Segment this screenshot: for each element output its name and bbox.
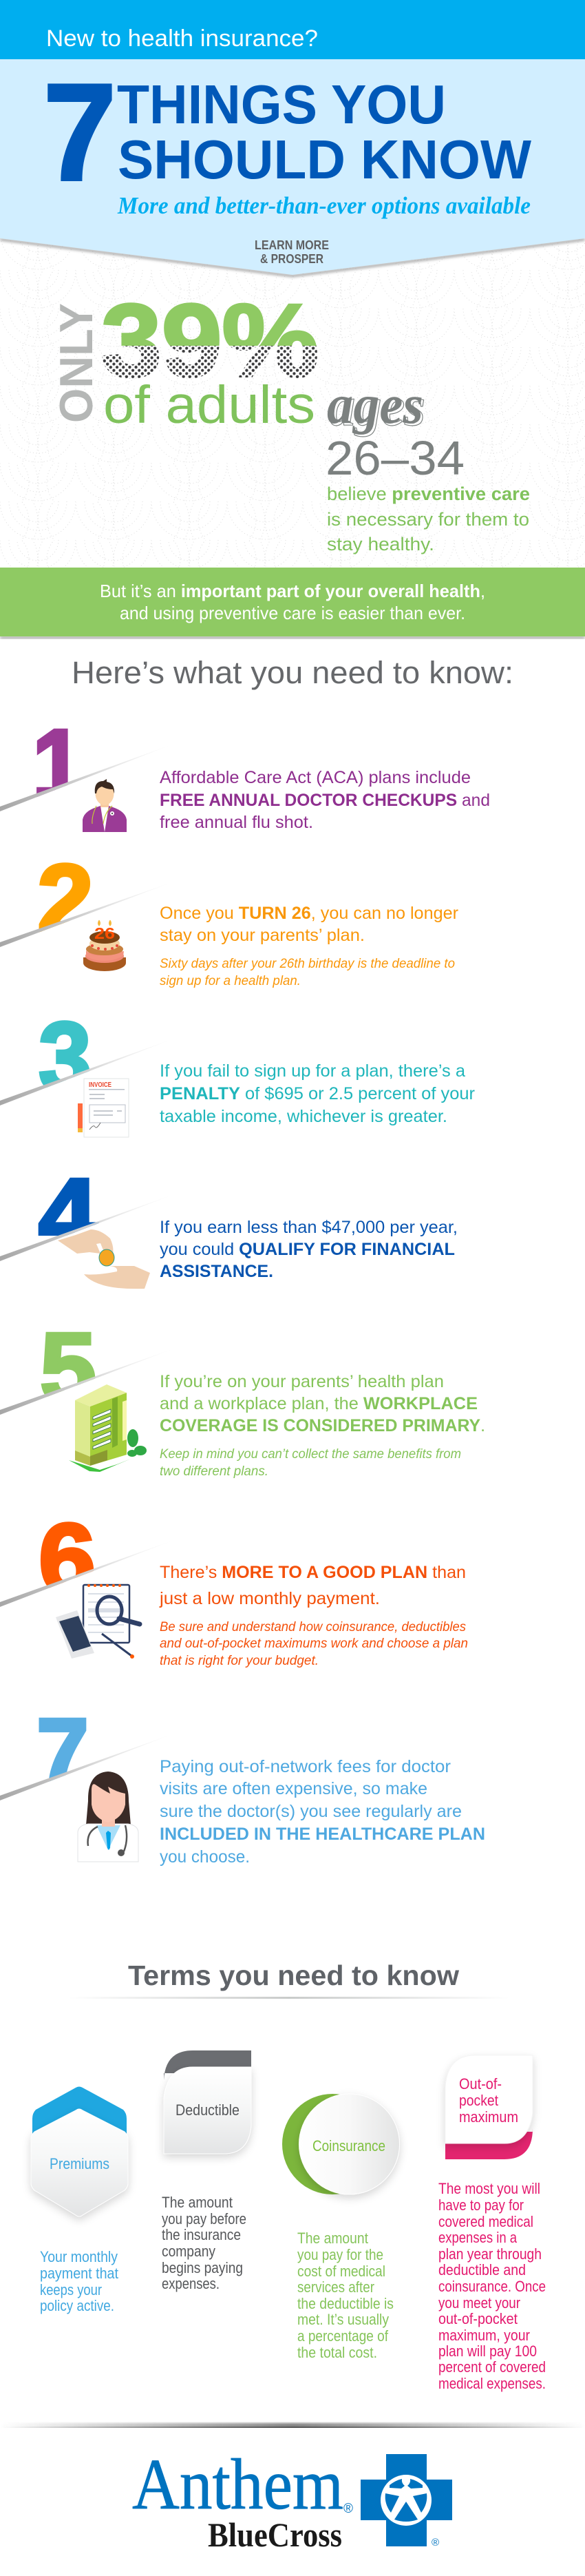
description: expenses in a xyxy=(438,2229,518,2246)
text: stay on your parents’ plan. xyxy=(160,926,365,945)
number 1: 1 xyxy=(32,709,83,820)
description: you pay for the xyxy=(297,2246,383,2263)
logo: anthem blue cross xyxy=(132,2444,452,2554)
label: maximum xyxy=(459,2108,518,2126)
description: percent of covered xyxy=(438,2358,546,2376)
text: Affordable Care Act (ACA) plans include xyxy=(160,768,471,787)
description: keeps your xyxy=(40,2281,102,2298)
label xyxy=(459,2075,518,2126)
text: FREE ANNUAL DOCTOR CHECKUPS and xyxy=(160,791,490,810)
description xyxy=(40,2248,118,2314)
text: taxable income, whichever is greater. xyxy=(160,1107,447,1126)
item 2 xyxy=(0,862,458,988)
heading: should know: SHOULD KNOW xyxy=(118,129,531,190)
text xyxy=(160,1061,475,1126)
panel: light blue title chevron xyxy=(0,55,585,277)
text: believe preventive care: is necessary for them to xyxy=(327,509,529,530)
description xyxy=(162,2194,246,2292)
description: deductible and xyxy=(438,2261,526,2278)
description: maximum, your xyxy=(438,2327,530,2344)
text: learn more and prosper xyxy=(255,238,329,266)
panel: top blue header xyxy=(0,0,585,59)
stat: 39 percent xyxy=(102,302,317,379)
panel: green banner xyxy=(0,568,585,638)
text: only: ONLY xyxy=(50,303,103,423)
heading: things you: THINGS YOU xyxy=(117,74,446,135)
description: coinsurance. Once xyxy=(438,2278,546,2295)
text: Sixty days after your 26th birthday is the deadline to xyxy=(160,957,455,971)
number 6: 6 xyxy=(39,1503,96,1614)
text: banner message: But it’s an important part of your overall health, xyxy=(100,581,485,601)
icon: birthday cake xyxy=(83,920,126,971)
number 2: 2 xyxy=(37,844,94,955)
text: 26-34: 26–34 xyxy=(326,431,465,485)
tagline: More and better-than-ever options available xyxy=(117,192,531,219)
icon: office building xyxy=(69,1384,147,1472)
item 7 xyxy=(0,1718,485,1866)
text: learn more and prosper: LEARN MORE xyxy=(255,238,329,252)
description: plan will pay 100 xyxy=(438,2343,537,2360)
description: The amount xyxy=(162,2194,233,2211)
stat: 39 percent: 39% xyxy=(101,282,319,398)
item 3 xyxy=(0,1020,475,1138)
text: PENALTY of $695 or 2.5 percent of your xyxy=(160,1084,475,1103)
panel: terms you need to know xyxy=(31,1960,546,2392)
panel: patterned background xyxy=(0,234,585,572)
description: you meet your xyxy=(438,2294,520,2312)
description: have to pay for xyxy=(438,2196,524,2214)
label: Out-of- xyxy=(459,2075,502,2092)
heading: 7: 7 xyxy=(43,56,116,209)
text: COVERAGE IS CONSIDERED PRIMARY. xyxy=(160,1416,485,1435)
item 6 xyxy=(0,1521,468,1668)
footer shadow xyxy=(0,2423,585,2576)
icon: blue cross: ® xyxy=(432,2537,439,2548)
text: INCLUDED IN THE HEALTHCARE PLAN xyxy=(160,1825,485,1844)
description: Your monthly xyxy=(40,2248,118,2265)
text: If you’re on your parents’ health plan xyxy=(160,1372,444,1391)
wordmark: Anthem xyxy=(132,2444,343,2524)
description: plan year through xyxy=(438,2245,542,2263)
icon: invoice: INVOICE xyxy=(89,1081,111,1089)
card: deductible xyxy=(162,2050,251,2292)
number 5: 5 xyxy=(40,1312,96,1424)
item 5 xyxy=(0,1332,484,1478)
description xyxy=(438,2180,546,2392)
text: banner message: and using preventive care is easier than ever. xyxy=(120,603,465,623)
item 4 xyxy=(0,1178,456,1289)
text: visits are often expensive, so make xyxy=(160,1779,427,1798)
panel: statistic xyxy=(50,282,530,554)
description: a percentage of xyxy=(297,2327,389,2345)
text: of adults: of adults xyxy=(103,375,315,435)
text xyxy=(159,1563,468,1668)
text: learn more and prosper: & PROSPER xyxy=(260,252,323,266)
text: There’s MORE TO A GOOD PLAN than xyxy=(160,1563,466,1582)
text: sign up for a health plan. xyxy=(160,974,301,988)
description: The amount xyxy=(297,2230,368,2247)
text xyxy=(160,1372,485,1479)
card: coinsurance xyxy=(282,2094,399,2361)
logo: anthem blue cross: ® xyxy=(343,2502,353,2516)
stat: 39 percent: 39% xyxy=(101,282,319,398)
text: believe preventive care: stay healthy. xyxy=(327,534,434,554)
icon: birthday cake: 26 xyxy=(94,924,115,942)
text: Keep in mind you can’t collect the same benefits from xyxy=(160,1447,461,1462)
text: Once you TURN 26, you can no longer xyxy=(160,904,458,923)
description: the total cost. xyxy=(297,2344,377,2361)
text: banner message xyxy=(100,581,485,623)
icon: hands and coin xyxy=(58,1229,150,1289)
card: out-of-pocket maximum xyxy=(438,2055,546,2392)
description: expenses. xyxy=(162,2275,220,2292)
text: Paying out-of-network fees for doctor xyxy=(160,1757,451,1776)
number 3: 3 xyxy=(39,1001,92,1113)
description: the deductible is xyxy=(297,2295,394,2312)
description: medical expenses. xyxy=(438,2375,546,2392)
heading: terms: Terms you need to know xyxy=(128,1960,459,1991)
description: out-of-pocket xyxy=(438,2310,518,2327)
icon: invoice xyxy=(78,1079,129,1137)
description: covered medical xyxy=(438,2213,533,2230)
text: believe preventive care: believe preventive care xyxy=(327,484,530,504)
description: The most you will xyxy=(438,2180,540,2197)
text: you could QUALIFY FOR FINANCIAL xyxy=(160,1240,455,1259)
description: cost of medical xyxy=(297,2263,385,2280)
text: ASSISTANCE. xyxy=(160,1262,273,1281)
description: policy active. xyxy=(40,2297,114,2314)
card: premiums xyxy=(31,2087,128,2314)
description: met. It’s usually xyxy=(297,2311,389,2328)
label: Deductible xyxy=(176,2101,240,2119)
text: two different plans. xyxy=(160,1464,268,1479)
text: If you fail to sign up for a plan, there’s a xyxy=(160,1061,465,1081)
description: begins paying xyxy=(162,2259,243,2276)
text: you choose. xyxy=(160,1847,250,1867)
text: free annual flu shot. xyxy=(160,813,313,832)
text xyxy=(160,1218,458,1281)
text: If you earn less than $47,000 per year, xyxy=(160,1218,458,1237)
label: pocket xyxy=(459,2092,498,2109)
icon: female doctor xyxy=(78,1772,138,1862)
description: the insurance xyxy=(162,2226,241,2243)
text: believe preventive care xyxy=(327,484,530,554)
icon: magnifier, phone and notepad xyxy=(56,1584,140,1659)
icon: blue cross xyxy=(361,2454,452,2548)
text: and a workplace plan, the WORKPLACE xyxy=(160,1394,478,1413)
text: and out-of-pocket maximums work and choose a plan xyxy=(160,1637,468,1651)
description: you pay before xyxy=(162,2210,246,2227)
description: payment that xyxy=(40,2265,118,2282)
text: Be sure and understand how coinsurance, deductibles xyxy=(160,1620,466,1634)
logo: anthem blue cross: BlueCross xyxy=(208,2515,342,2554)
text: sure the doctor(s) you see regularly are xyxy=(160,1802,462,1821)
text: just a low monthly payment. xyxy=(159,1589,380,1608)
text: new to health insurance: New to health insurance? xyxy=(46,25,318,52)
description: services after xyxy=(297,2278,374,2296)
icon: male doctor xyxy=(83,779,127,832)
text: ages: ages xyxy=(329,377,425,437)
label: Premiums xyxy=(50,2155,109,2172)
description: company xyxy=(162,2243,215,2260)
label: Coinsurance xyxy=(312,2137,385,2154)
number 4: 4 xyxy=(39,1158,98,1269)
heading: here's what you need to know: Here’s what you need to know: xyxy=(72,655,513,690)
text xyxy=(160,1757,485,1867)
item 1 xyxy=(0,729,489,832)
number 7: 7 xyxy=(36,1698,89,1809)
text: that is right for your budget. xyxy=(160,1654,319,1668)
description xyxy=(297,2230,394,2361)
text: ages: ages xyxy=(327,375,423,435)
text xyxy=(160,768,490,832)
text xyxy=(160,904,458,988)
